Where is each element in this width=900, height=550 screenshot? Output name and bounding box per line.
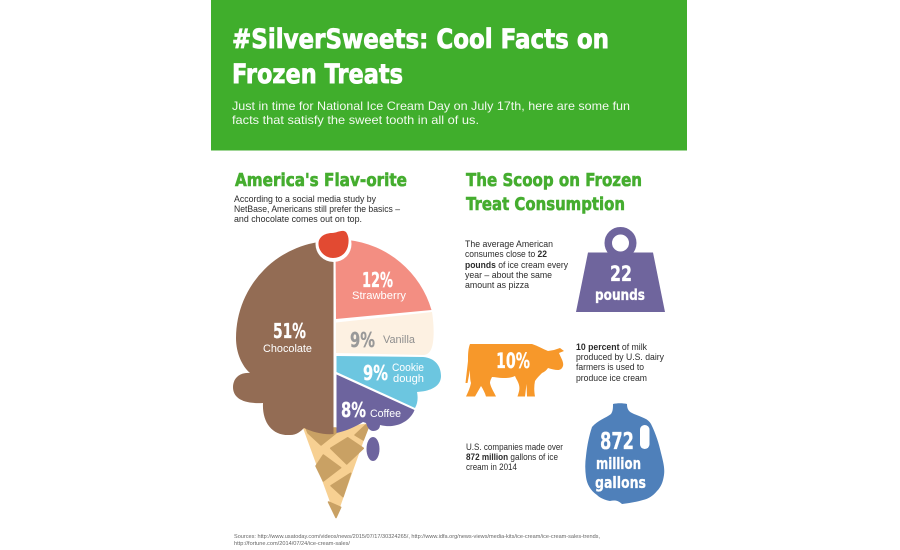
text: 872 million gallons fact: [466, 442, 563, 473]
text: 22 pounds fact: consumes close to 22: [465, 249, 547, 260]
text: sources: Sources: http://www.usatoday.com/videos/news/2015/07/17/30324265/, http://www.idfa.org/news-views/media-kits/ice-cream/ice-cream-sales-trends,: [234, 534, 600, 540]
heading: America's Flav-orite: America's Flav-orite: [235, 171, 407, 191]
title: [232, 24, 609, 90]
text: sources: http://fortune.com/2014/07/24/ice-cream-sales/: [234, 541, 350, 547]
icon: milk jug with 872 million gallons: gallons: [595, 473, 646, 492]
slice: chocolate 51%: 51%: [273, 319, 306, 343]
slice: coffee 8%: [336, 374, 414, 433]
icon: weight with 22 pounds: pounds: [595, 286, 645, 304]
text: 872 million gallons fact: U.S. companies made over: [466, 442, 563, 453]
text: 10 percent of milk fact: produced by U.S. dairy: [576, 352, 664, 363]
slice: chocolate 51%: [233, 241, 334, 435]
text: 22 pounds fact: amount as pizza: [465, 280, 530, 291]
text: flavor study intro: and chocolate comes out on top.: [234, 214, 362, 225]
panel: green header: [211, 0, 687, 150]
text: 22 pounds fact: year – about the same: [465, 270, 552, 281]
header intro text: [232, 99, 630, 127]
slice: cookie dough 9%: Cookie: [392, 362, 424, 374]
header intro text: facts that satisfy the sweet tooth in all of us.: [232, 113, 479, 127]
heading: The Scoop on Frozen Treat Consumption: [466, 171, 642, 215]
icon: milk jug with 872 million gallons: million: [596, 454, 641, 473]
title: Frozen Treats: [232, 59, 403, 90]
text: flavor study intro: [234, 194, 401, 225]
text: 10 percent of milk fact: [576, 342, 664, 384]
title: #SilverSweets: Cool Facts on: [232, 24, 609, 55]
icon: cow with 10%: [466, 344, 564, 396]
slice: strawberry 12%: 12%: [362, 268, 393, 292]
slice: cookie dough 9%: dough: [393, 373, 424, 385]
text: 10 percent of milk fact: 10 percent of milk: [576, 342, 647, 353]
slice: cookie dough 9%: 9%: [363, 361, 388, 385]
icon: weight with 22 pounds: 22: [610, 262, 632, 286]
chart: ice cream cone flavor pie: [233, 226, 441, 518]
text: 10 percent of milk fact: produce ice cream: [576, 373, 647, 384]
text: 22 pounds fact: The average American: [465, 239, 553, 250]
icon: weight with 22 pounds: [576, 231, 665, 312]
text: 872 million gallons fact: cream in 2014: [466, 462, 517, 473]
slice: chocolate 51%: Chocolate: [263, 343, 312, 355]
icon: cow with 10%: 10%: [496, 349, 530, 373]
text: sources: [234, 534, 600, 547]
slice: cookie dough 9%: [336, 356, 441, 408]
text: flavor study intro: According to a social media study by: [234, 194, 376, 205]
text: 10 percent of milk fact: farmers is used to: [576, 362, 644, 373]
text: 22 pounds fact: [465, 239, 568, 291]
text: 22 pounds fact: pounds of ice cream every: [465, 260, 568, 271]
slice: coffee 8%: Coffee: [370, 408, 401, 420]
slice: vanilla 9%: 9%: [350, 328, 375, 352]
header intro text: Just in time for National Ice Cream Day on July 17th, here are some fun: [232, 99, 630, 113]
slice: strawberry 12%: Strawberry: [352, 290, 406, 302]
text: flavor study intro: NetBase, Americans still prefer the basics –: [234, 204, 401, 215]
slice: coffee 8%: 8%: [341, 398, 366, 422]
slice: strawberry 12%: [336, 240, 432, 319]
icon: milk jug with 872 million gallons: [585, 403, 664, 504]
icon: coffee drip: [366, 437, 380, 461]
text: 872 million gallons fact: 872 million gallons of ice: [466, 452, 558, 463]
slice: vanilla 9%: Vanilla: [383, 334, 416, 346]
icon: waffle cone: [303, 423, 370, 518]
heading: The Scoop on Frozen Treat Consumption: The Scoop on Frozen: [466, 171, 642, 191]
slice: vanilla 9%: [336, 312, 434, 355]
icon: cherry: [316, 226, 352, 262]
icon: milk jug with 872 million gallons: 872: [600, 429, 634, 455]
heading: The Scoop on Frozen Treat Consumption: Treat Consumption: [466, 195, 625, 215]
